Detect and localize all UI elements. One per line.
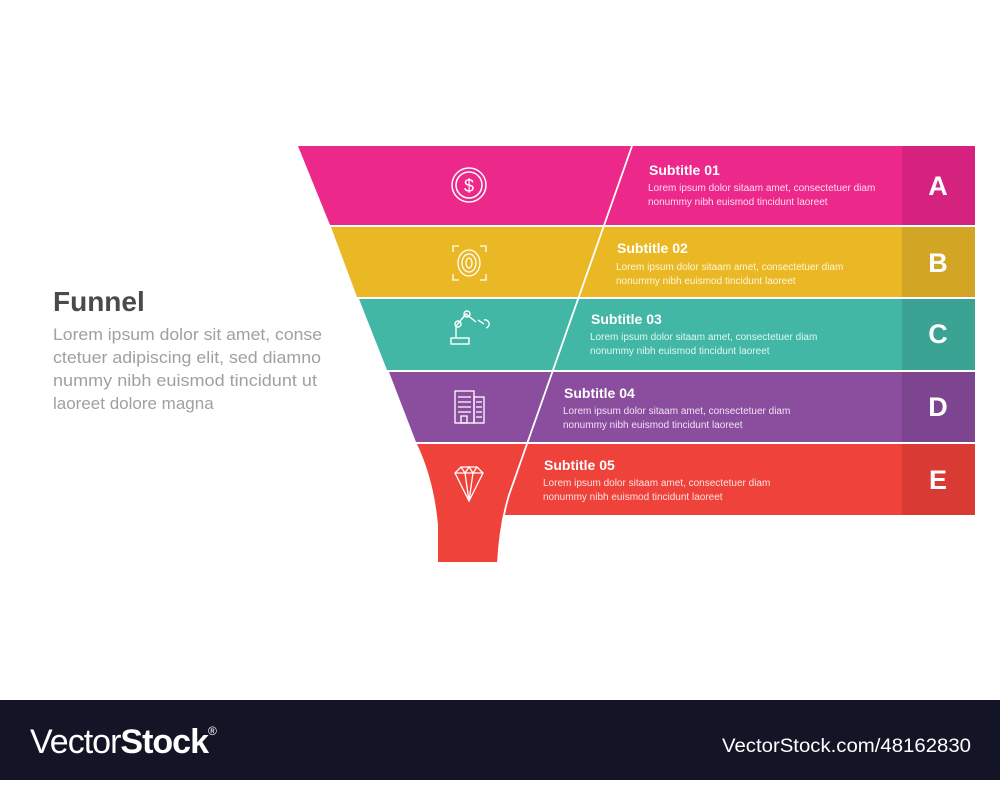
band 5: [417, 444, 975, 562]
footer bar: [0, 700, 1000, 780]
icon: building: [455, 391, 484, 423]
icon: dollar coin: [452, 168, 486, 202]
band 2: Subtitle 02: [617, 240, 688, 256]
band 1: [298, 146, 975, 225]
band 5: E: [929, 465, 947, 495]
band 4: Lorem ipsum dolor sitaam amet, consectetuer diam: [563, 406, 790, 417]
band 1: nonummy nibh euismod tincidunt laoreet: [648, 197, 828, 208]
icon: fingerprint: [453, 246, 486, 280]
icon: robot arm: [451, 311, 489, 344]
band 1: A: [928, 171, 948, 201]
band 4: [389, 372, 975, 442]
band 3: Lorem ipsum dolor sitaam amet, consectetuer diam: [590, 332, 817, 343]
band 4: Subtitle 04: [564, 385, 635, 401]
band 4: nonummy nibh euismod tincidunt laoreet: [563, 420, 743, 431]
band 2: Lorem ipsum dolor sitaam amet, consectetuer diam: [616, 262, 843, 273]
band 1: Subtitle 01: [649, 162, 720, 178]
icon: dollar coin: $: [464, 176, 474, 196]
band 2: B: [928, 248, 948, 278]
band 3: Subtitle 03: [591, 311, 662, 327]
icon: diamond: [455, 467, 483, 501]
footer bar: VectorStock: [30, 723, 208, 761]
band 1: Lorem ipsum dolor sitaam amet, consectetuer diam: [648, 183, 875, 194]
band 5: Lorem ipsum dolor sitaam amet, consectetuer diam: [543, 478, 770, 489]
description text: laoreet dolore magna: [53, 394, 214, 413]
band 2: [331, 227, 975, 297]
description text: nummy nibh euismod tincidunt ut: [53, 371, 317, 390]
band 3: C: [928, 319, 948, 349]
footer bar: VectorStock.com/48162830: [722, 736, 971, 757]
diagonal divider line: [498, 146, 632, 562]
band 3: nonummy nibh euismod tincidunt laoreet: [590, 346, 770, 357]
footer bar: ®: [208, 724, 217, 738]
band 5: Subtitle 05: [544, 457, 615, 473]
band 2: nonummy nibh euismod tincidunt laoreet: [616, 276, 796, 287]
description text: Lorem ipsum dolor sit amet, conse: [53, 325, 322, 344]
band 3: [359, 299, 975, 370]
description text: [53, 325, 322, 413]
band 5: nonummy nibh euismod tincidunt laoreet: [543, 492, 723, 503]
band 4: D: [928, 392, 948, 422]
title: Funnel: [53, 286, 145, 317]
description text: ctetuer adipiscing elit, sed diamno: [53, 348, 321, 367]
